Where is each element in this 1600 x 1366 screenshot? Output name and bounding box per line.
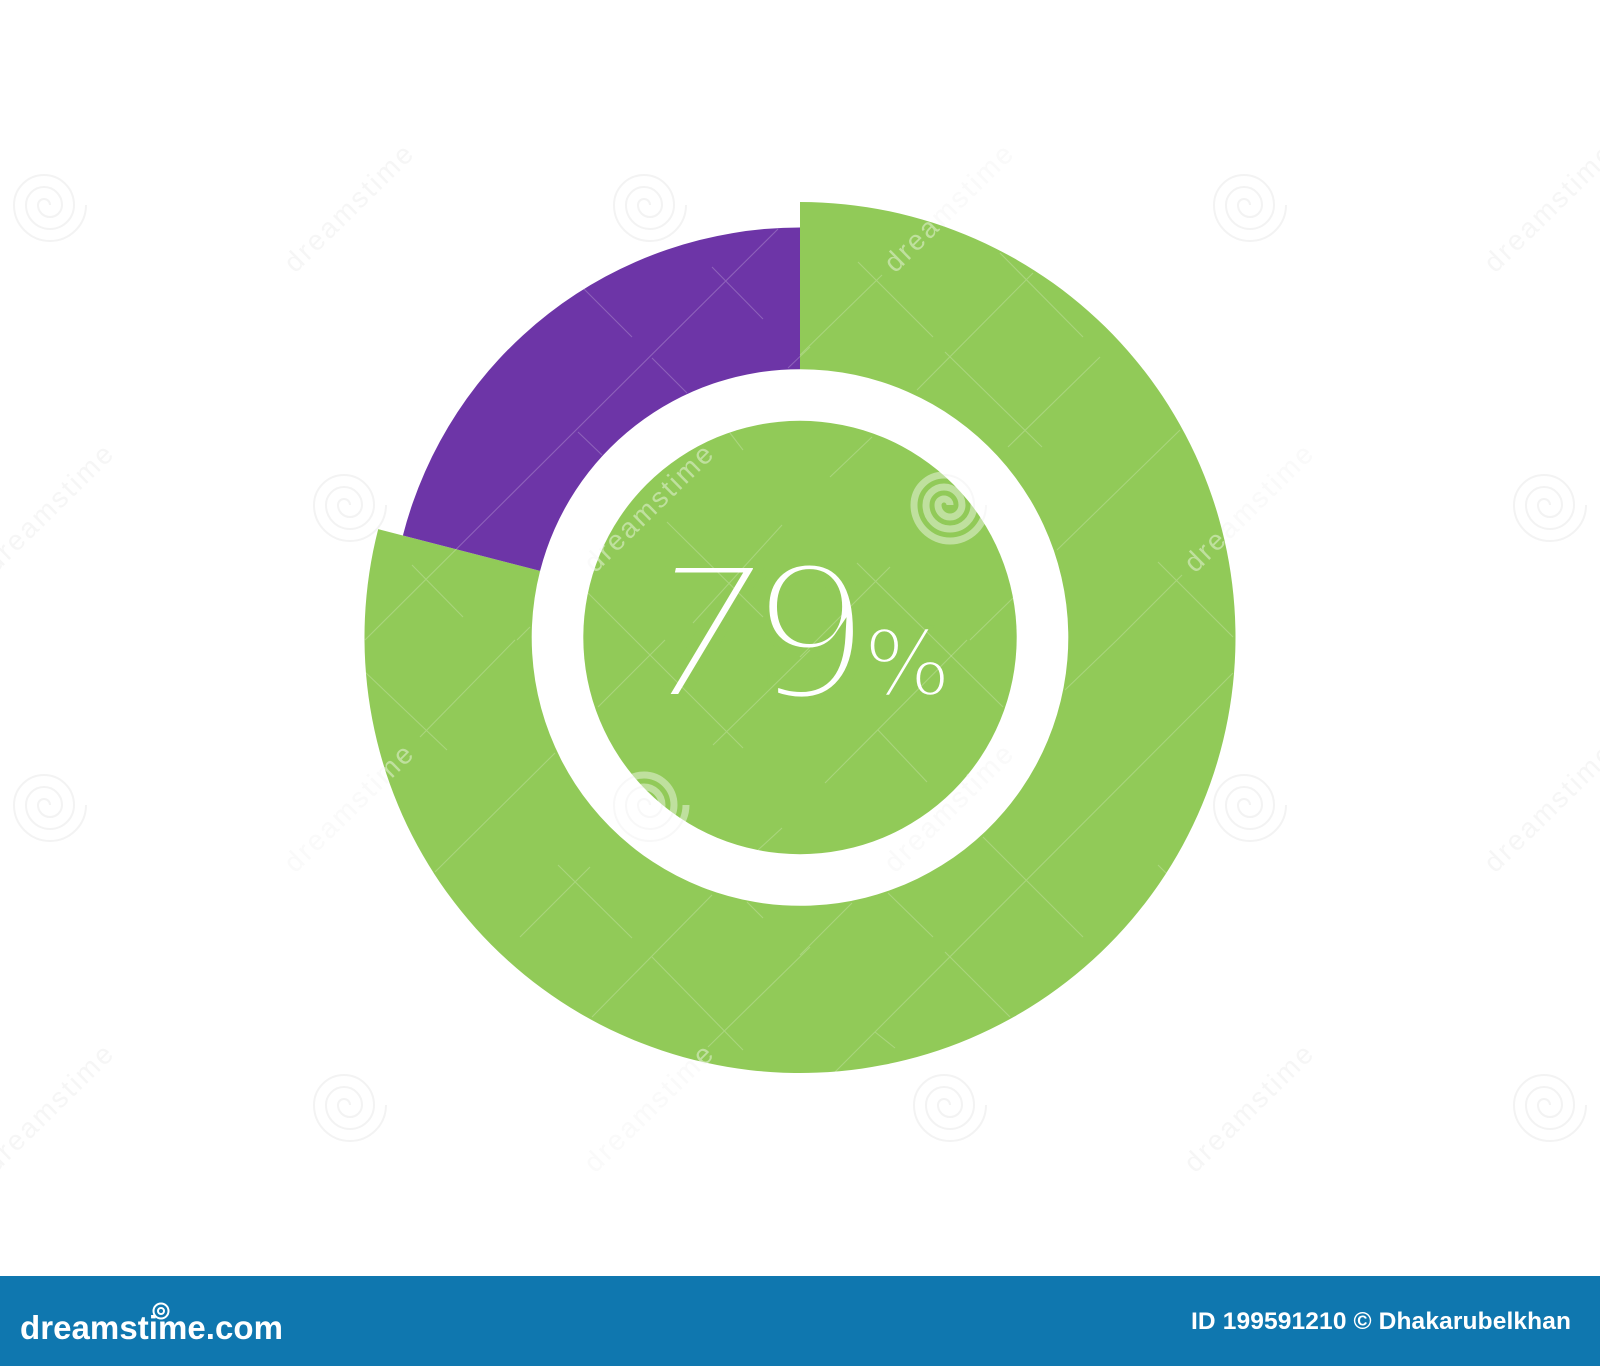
center green circle [583,421,1017,854]
watermark: faint spirals and text on white background: dreamstime [578,438,719,578]
watermark: overlay on coloured shapes [278,138,1319,1178]
watermark: faint spirals and text on white background: dreamstime [878,138,1019,278]
center value: 79%: 7 [618,525,784,744]
purple segment: 21% [403,228,800,571]
donut chart [364,202,1235,1073]
watermark: overlay on coloured shapes: dreamstime [278,738,419,878]
center value: 79%: % [864,612,950,717]
watermark: faint spirals and text on white background: dreamstime [1178,438,1319,578]
watermark: overlay on coloured shapes: dreamstime [878,138,1019,278]
watermark: overlay on coloured shapes: dreamstime [578,1038,719,1178]
watermark: faint spirals and text on white background: dreamstime [278,138,419,278]
watermark: faint spirals and text on white background: dreamstime [278,738,419,878]
watermark: faint spirals and text on white background: dreamstime [878,738,1019,878]
footer bar [0,1276,1600,1366]
watermark: overlay on coloured shapes: dreamstime [878,738,1019,878]
footer image id and credit: ID 199591210 © Dhakarubelkhan [1191,1308,1571,1335]
center value: 79% [618,525,950,744]
watermark: faint spirals and text on white background [0,138,1600,1178]
watermark: faint spirals and text on white background: dreamstime [1178,1038,1319,1178]
watermark: faint spirals and text on white background: dreamstime [578,1038,719,1178]
watermark: overlay on coloured shapes: dreamstime [578,438,719,578]
icon: logo spiral [154,1304,168,1318]
watermark: overlay on coloured shapes: dreamstime [1178,438,1319,578]
footer logo text: dreamstime.com [20,1309,283,1346]
center value: 79%: 9 [752,526,872,744]
green segment: 79% [364,202,1235,1073]
